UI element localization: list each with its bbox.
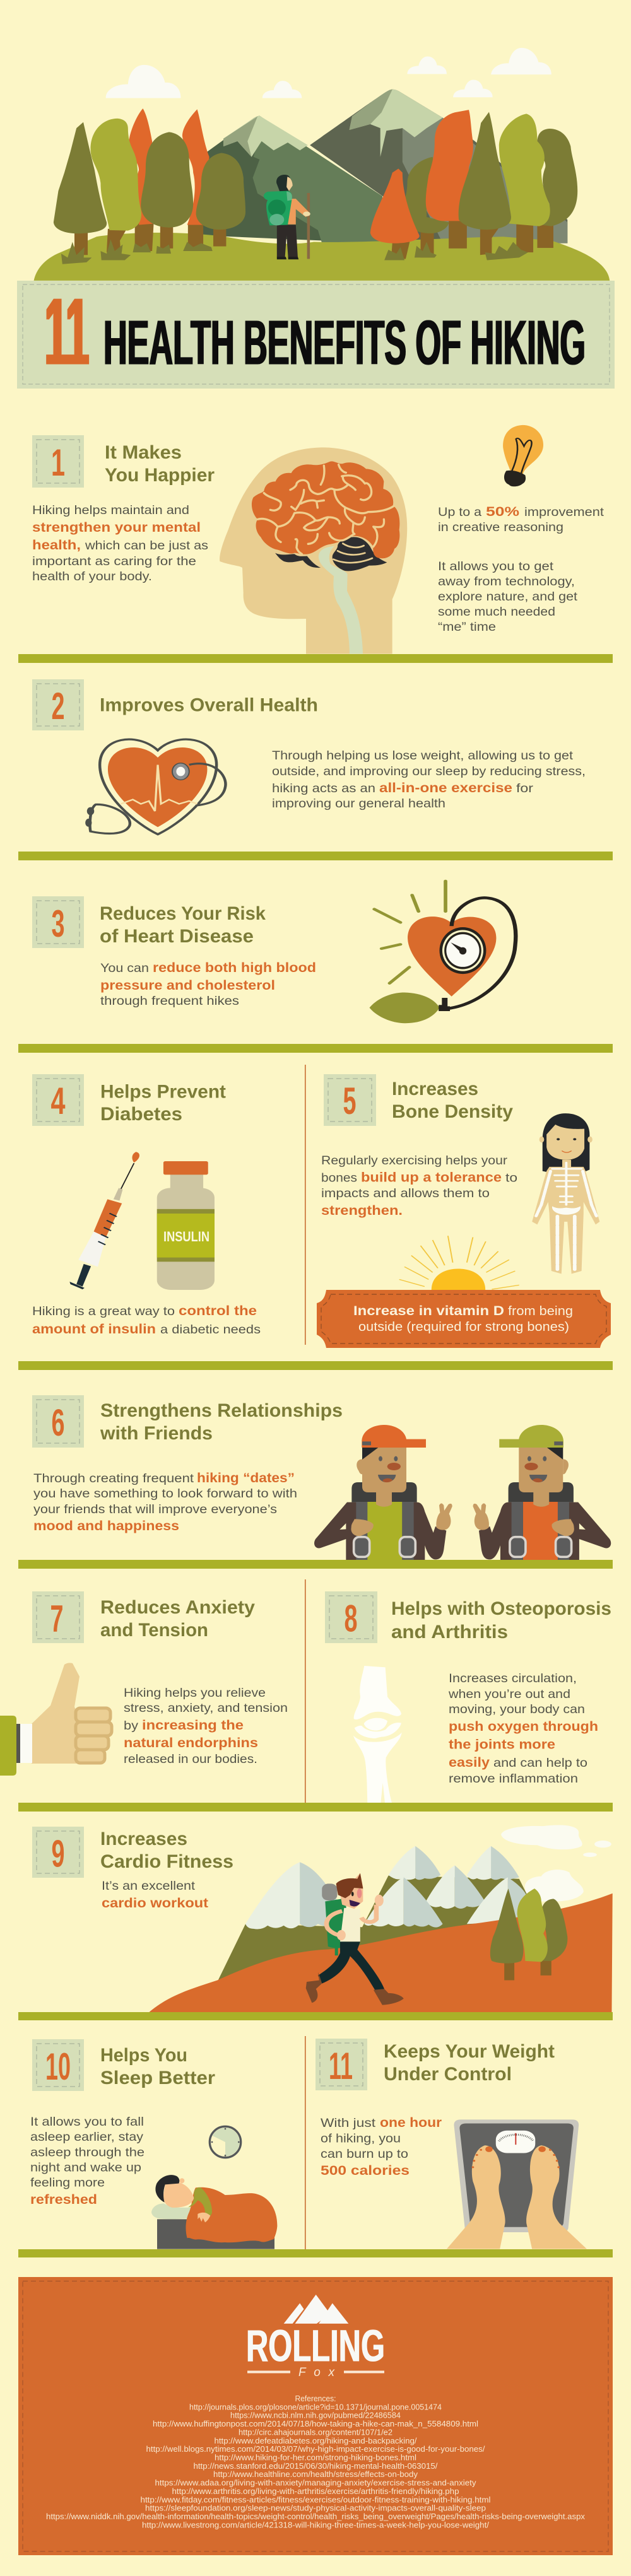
badge 4: 4 [50,1080,66,1122]
heading 8: Helps with Osteoporosis [391,1598,611,1619]
heading 4: Diabetes [100,1104,182,1125]
orange hill [148,1894,613,2013]
text 2: improving our general health [272,797,445,811]
trees [490,1888,567,1980]
badge 7 [32,1591,84,1643]
heading 5: Bone Density [392,1101,513,1122]
text 8 [448,1671,598,1786]
text 2: all-in-one exercise [379,781,512,795]
illustration: clock and sleeping person [151,2126,277,2249]
icon: insulin bottle [157,1161,215,1290]
section 9 [32,1825,613,2013]
heading 2: Improves Overall Health [100,695,318,715]
text left: strengthen your mental [32,520,201,535]
heading 7: and Tension [100,1620,208,1641]
references: http://www.healthline.com/health/stress/effects-on-body [213,2470,418,2479]
references: http://news.stanford.edu/2015/06/30/hiking-mental-health-063015/ [193,2462,438,2471]
references: https://sleepfoundation.org/sleep-news/study-physical-activity-impacts-overall-quality-sleep [145,2504,486,2513]
text 7: natural endorphins [124,1736,258,1750]
hiker [264,175,310,259]
icon: thumbs up [0,1663,112,1776]
badge 2 [32,679,84,730]
text 3: pressure and cholesterol [100,978,275,993]
badge 2: 2 [52,685,64,727]
text 7: stress, anxiety, and tension [124,1701,288,1715]
references: http://www.arthritis.org/living-with-arthritis/exercise/arthritis-friendly/hiking.php [172,2487,459,2496]
trees [54,108,577,243]
text 10: refreshed [30,2193,97,2207]
heading 9 [100,1829,233,1872]
text 9: cardio workout [102,1896,208,1911]
badge 3: 3 [52,903,64,945]
text 6 [33,1471,297,1533]
badge 9 [32,1827,84,1878]
icon: heart with blood pressure gauge [370,881,516,1023]
section 1 [32,425,604,654]
text 10: asleep through the [30,2146,144,2160]
text 4: control the [179,1304,257,1318]
text 3 [100,961,316,1008]
text right: in creative reasoning [438,520,563,534]
text 7: released in our bodies. [124,1752,257,1766]
heading 9: Cardio Fitness [100,1851,233,1872]
text 10: It allows you to fall [30,2115,144,2129]
references: http://www.hiking-for-her.com/strong-hiking-bones.html [215,2454,416,2462]
references: References: [295,2394,336,2403]
illustration: hiker on mountain [148,1825,613,2013]
text 11: one hour [380,2116,442,2130]
callout: vitamin D: from being [508,1304,573,1318]
text 5: impacts and allows them to [321,1186,490,1200]
snow peaks [245,1846,528,1929]
section 7 [0,1591,288,1776]
references: https://www.adaa.org/living-with-anxiety/managing-anxiety/exercise-stress-and-anxiety [155,2479,476,2488]
references: http://well.blogs.nytimes.com/2014/03/07/why-high-impact-exercise-is-good-for-your-bones/ [146,2445,485,2454]
badge 5 [324,1074,376,1126]
badge 10: 10 [45,2046,71,2088]
text 10: feeling more [30,2176,105,2190]
illustration: sun [399,1236,519,1290]
text 6: you have something to look forward to with [33,1487,297,1501]
heading 11 [384,2041,555,2085]
section 11 [316,2039,587,2249]
heading 6 [100,1400,343,1444]
divider vertical 10-11 [305,2036,306,2249]
text right: It allows you to get [438,559,554,573]
text 7: Hiking helps you relieve [124,1686,266,1700]
text right: explore nature, and get [438,590,578,604]
text right: improvement [524,505,604,519]
references [46,2394,586,2529]
section 10 [30,2039,277,2249]
heading 6: Strengthens Relationships [100,1400,343,1421]
text 3: through frequent hikes [100,994,239,1008]
references: http://journals.plos.org/plosone/article?id=10.1371/journal.pone.0051474 [189,2403,442,2411]
text left: Hiking helps maintain and [32,503,189,517]
text 2: hiking acts as an [272,782,375,795]
heading 4 [100,1081,226,1125]
text 8: Increases circulation, [449,1671,577,1685]
heading 6: with Friends [100,1423,213,1444]
text 11: 500 calories [321,2163,410,2178]
text 4: Hiking is a great way to [32,1304,175,1318]
callout: vitamin D [317,1290,611,1348]
title panel [17,278,615,389]
illustration: friend left [314,1425,452,1561]
text 2: outside, and improving our sleep by reducing stress, [272,764,586,778]
heading 1 [105,442,215,486]
badge 3 [32,896,84,948]
references: https://www.niddk.nih.gov/health-information/health-topics/weight-control/health_risks_being_overweight/Pages/health-risks-being-overweight.aspx [46,2512,586,2521]
text 2: Through helping us lose weight, allowing us to get [272,749,574,763]
text left: health, [32,538,81,553]
text 8: moving, your body can [449,1702,585,1716]
callout: vitamin D: Increase in vitamin D [353,1304,504,1318]
heading 9: Increases [100,1829,187,1849]
badge 11: 11 [329,2045,353,2087]
references: http://www.defeatdiabetes.org/hiking-and-backpacking/ [215,2437,417,2445]
text 7: by [124,1719,138,1733]
mountains [201,90,567,243]
text 9 [102,1879,208,1911]
text 4: amount of insulin [32,1322,156,1337]
text left: health of your body. [32,570,152,583]
divider vertical 7-8 [305,1579,306,1810]
hill [34,233,610,281]
illustration: friend right [473,1425,611,1561]
text 5 [321,1154,517,1218]
text 6: your friends that will improve everyone’s [33,1502,277,1516]
logo mountains [284,2295,348,2324]
badge 1 [32,435,84,488]
section 8 [325,1591,611,1803]
heading 3: of Heart Disease [100,926,254,947]
badge 8: 8 [345,1597,357,1640]
bottle label: INSULIN [163,1229,209,1244]
badge 1: 1 [51,442,65,484]
clouds [106,48,551,98]
badge 4 [32,1074,84,1126]
badge 5: 5 [343,1080,356,1122]
text 11: can burn up to [321,2147,408,2161]
heading 3 [100,903,266,947]
text 8: push oxygen through [449,1719,598,1734]
text 2 [272,749,586,811]
heading 10: Helps You [100,2045,187,2066]
text 4: a diabetic needs [160,1323,261,1337]
heading 1: You Happier [105,465,215,486]
heading 11: Keeps Your Weight [384,2041,555,2062]
references: http://circ.ahajournals.org/content/107/1/e2 [239,2428,392,2437]
text 3: reduce both high blood [153,961,316,975]
callout: vitamin D: outside (required for strong bones) [358,1320,569,1334]
badge 10 [32,2039,84,2091]
icon: heart and stethoscope [85,739,225,834]
text 11: With just [321,2116,376,2130]
heading 1: It Makes [105,442,182,463]
references: http://www.fitday.com/fitness-articles/fitness/exercises/outdoor-fitness-training-with-hiking.html [140,2495,491,2504]
text right: 50% [486,505,519,519]
heading 10: Sleep Better [100,2068,215,2088]
divider vertical 4-5 [305,1065,306,1345]
icon: knee joint [353,1666,402,1803]
text 5: to [505,1171,517,1185]
text right: some much needed [438,605,555,619]
text left: important as caring for the [32,554,196,568]
heading 7 [100,1597,255,1641]
text 7: increasing the [142,1718,244,1733]
badge 9: 9 [52,1833,64,1875]
text 4 [32,1304,261,1337]
hiker [306,1873,404,2005]
logo subline: Fox [298,2366,336,2379]
text 11: of hiking, you [321,2132,401,2146]
clouds [501,1825,611,1901]
badge 6: 6 [52,1402,64,1444]
section 3 [32,881,516,1023]
illustration: woman skeleton [532,1113,599,1274]
text 8: when you’re out and [448,1687,570,1701]
heading 8 [391,1598,611,1642]
text 8: easily [449,1755,490,1770]
title panel: 11 [45,278,89,385]
section 4 [32,1074,261,1337]
heading 5 [392,1079,513,1122]
heading 3: Reduces Your Risk [100,903,266,924]
badge 11 [316,2039,367,2090]
heading 10 [100,2045,215,2088]
text 6: mood and happiness [33,1519,179,1533]
footer panel [18,2277,613,2555]
grass tufts [61,239,528,264]
text 5: Regularly exercising helps your [321,1154,508,1168]
icon: light bulb [503,425,543,486]
text 2: for [516,782,534,795]
section 5 [317,1074,611,1348]
references: http://www.livestrong.com/article/421318-will-hiking-three-times-a-week-help-you-lose-weight/ [142,2520,490,2529]
text 6: hiking “dates” [197,1471,295,1485]
text right [438,505,604,634]
text 8: the joints more [449,1737,555,1752]
text 11 [321,2116,442,2178]
text 3: You can [100,961,149,975]
illustration: mountain landscape with hiker [34,48,610,281]
heading 7: Reduces Anxiety [100,1597,255,1618]
section 2 [32,679,586,834]
text 10: asleep earlier, stay [30,2130,143,2144]
text 5: build up a tolerance [361,1171,502,1185]
trunks [74,220,553,259]
text 10 [30,2115,144,2207]
heading 11: Under Control [384,2064,512,2085]
text right: Up to a [438,505,481,519]
references: http://www.huffingtonpost.com/2014/07/18/how-taking-a-hike-can-mak_n_5584809.html [153,2420,478,2428]
badge 8 [325,1591,377,1643]
badge 7: 7 [50,1597,63,1640]
heading 5: Increases [392,1079,478,1099]
text 8: and can help to [493,1756,587,1770]
heading 4: Helps Prevent [100,1081,226,1103]
text 10: night and wake up [30,2161,141,2175]
text 5: strengthen. [321,1203,403,1218]
logo subline [247,2366,384,2379]
section 6 [32,1395,611,1561]
icon: syringe [69,1152,139,1289]
text left: which can be just as [85,539,208,553]
text 9: It’s an excellent [102,1879,196,1893]
text 7 [124,1686,288,1766]
text left [32,503,208,583]
references: https://www.ncbi.nlm.nih.gov/pubmed/22486584 [230,2411,401,2420]
logo wordmark: ROLLING [246,2321,385,2372]
text 5: bones [321,1171,357,1185]
text right: “me” time [438,620,496,634]
heading 8: and Arthritis [391,1622,508,1642]
text 6: Through creating frequent [33,1472,194,1485]
text 8: remove inflammation [449,1772,578,1786]
text right: away from technology, [438,575,575,588]
badge 6 [32,1395,84,1448]
mountain base [217,1876,528,1982]
illustration: head and brain [220,447,407,654]
logo [246,2295,385,2379]
illustration: weighing scale with feet [447,2119,587,2249]
